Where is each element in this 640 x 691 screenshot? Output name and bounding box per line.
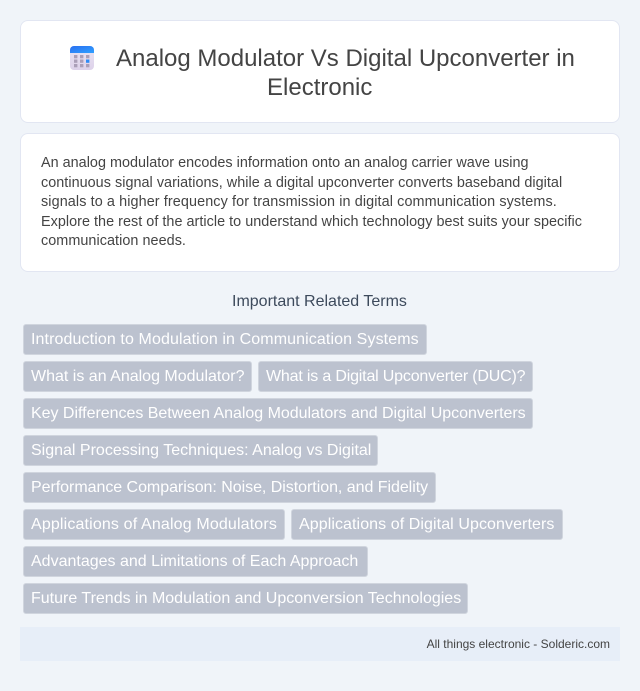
text block: introduction: An analog modulator encodes information onto an analog carrier wave using — [41, 155, 529, 171]
tag: Introduction to Modulation in Communication Systems — [31, 331, 419, 348]
tag: Advantages and Limitations of Each Approach — [31, 553, 358, 570]
title — [116, 45, 575, 101]
panel: introduction text — [20, 133, 620, 272]
footer credit: All things electronic - Solderic.com — [427, 637, 610, 651]
tag: Future Trends in Modulation and Upconversion Technologies — [31, 590, 461, 607]
tag: What is an Analog Modulator? — [31, 368, 244, 385]
text block: introduction: Explore the rest of the article to understand which technology best suits your specific — [41, 214, 582, 230]
text block: introduction: signals to a higher frequency for transmission in digital communication systems. — [41, 194, 557, 210]
panel: title card: Analog Modulator Vs Digital Upconverter in — [116, 45, 575, 72]
icon: calendar — [70, 46, 94, 70]
tag: What is a Digital Upconverter (DUC)? — [266, 368, 525, 385]
footer — [20, 627, 620, 661]
text block: introduction: communication needs. — [41, 233, 186, 249]
tag — [23, 472, 436, 503]
panel: title card: Electronic — [267, 74, 372, 101]
tag — [23, 435, 378, 466]
text block: introduction: continuous signal variations, while a digital upconverter converts baseband digital — [41, 175, 562, 191]
tag: Performance Comparison: Noise, Distortion, and Fidelity — [31, 479, 428, 496]
tag: Applications of Digital Upconverters — [299, 516, 554, 533]
tag — [23, 361, 252, 392]
panel: related terms tags — [23, 324, 563, 614]
tag: Key Differences Between Analog Modulators and Digital Upconverters — [31, 405, 526, 422]
tag — [258, 361, 533, 392]
heading: important related terms: Important Related Terms — [232, 293, 407, 310]
tag — [23, 546, 368, 577]
tag: Signal Processing Techniques: Analog vs Digital — [31, 442, 371, 459]
panel: title card — [20, 20, 620, 123]
tag: Applications of Analog Modulators — [31, 516, 277, 533]
tag — [23, 398, 533, 429]
tag — [291, 509, 563, 540]
text block: introduction — [41, 155, 582, 249]
tag — [23, 324, 427, 355]
tag — [23, 583, 468, 614]
tag — [23, 509, 285, 540]
